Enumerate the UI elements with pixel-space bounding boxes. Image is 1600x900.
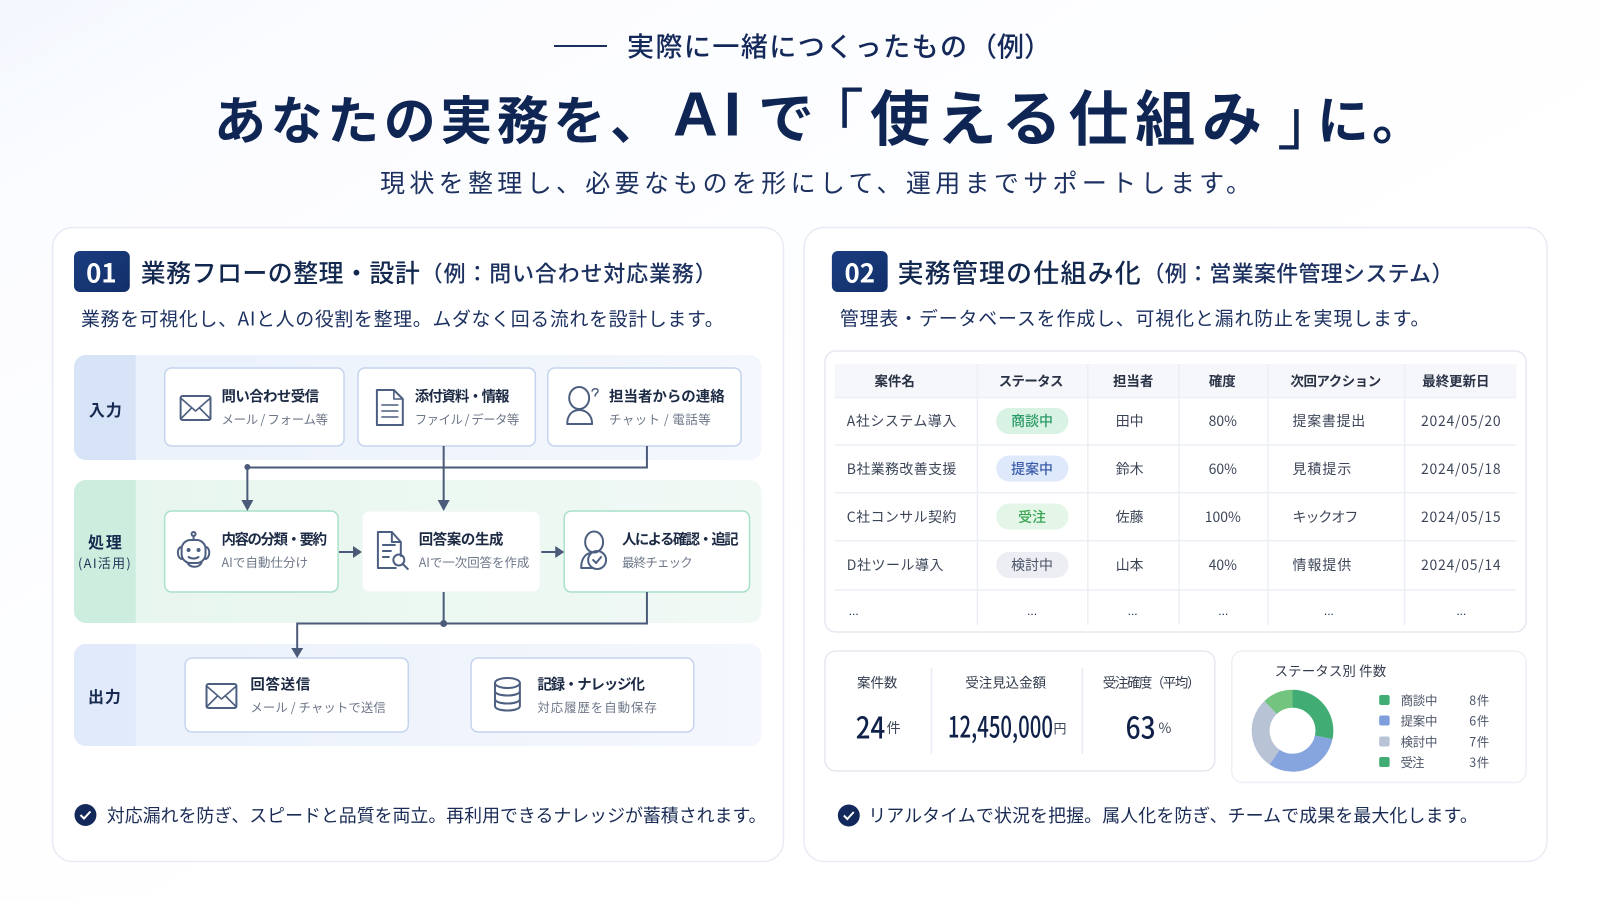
card: record knowledge: 記録・ナレッジ化 — [537, 673, 645, 695]
badge 01 — [74, 251, 130, 292]
card: attachments: ファイル / データ等 — [415, 410, 519, 428]
main title: 使える仕組み — [870, 72, 1262, 158]
table header: 案件名 — [874, 370, 915, 390]
table header — [835, 364, 1517, 397]
table header: 担当者 — [1113, 370, 1153, 390]
card: send answer: メール / チャットで送信 — [250, 698, 386, 716]
card: classify and summarise: AIで自動仕分け — [221, 553, 308, 571]
footer note 02: リアルタイムで状況を把握。属人化を防ぎ、チームで成果を最大化します。 — [868, 802, 1478, 828]
arrows: input to process — [241, 446, 647, 511]
panel: 01 business flow — [52, 228, 784, 862]
chart legend: 商談中 — [1401, 691, 1437, 709]
table row A: 田中 — [1116, 411, 1144, 431]
label: input: 入力 — [89, 397, 122, 421]
row: output — [74, 644, 762, 746]
table row D: 情報提供 — [1293, 555, 1351, 575]
KPI: average probability — [1103, 671, 1200, 748]
panel 01 content — [74, 251, 766, 828]
donut chart — [1261, 699, 1324, 763]
KPI: expected amount: 12,450,000 — [948, 704, 1053, 747]
footer note 01: 対応漏れを防ぎ、スピードと品質を両立。再利用できるナレッジが蓄積されます。 — [107, 802, 766, 828]
table row A: A社システム導入 — [847, 411, 956, 431]
main title: 「 — [802, 68, 864, 158]
row: process — [74, 480, 762, 623]
card: attachments — [358, 368, 535, 446]
KPI: average probability: 受注確度（平均） — [1103, 671, 1200, 692]
chart legend: 3件 — [1469, 753, 1489, 771]
table grid — [835, 364, 1516, 625]
table box — [825, 351, 1526, 632]
panel description 02: 管理表・データベースを作成し、可視化と漏れ防止を実現します。 — [840, 304, 1429, 331]
table row A: 2024/05/20 — [1421, 411, 1501, 431]
panel heading 01 — [141, 254, 717, 290]
card: attachments: 添付資料・情報 — [415, 385, 510, 407]
table row B: 2024/05/18 — [1421, 459, 1501, 479]
card: human check: 最終チェック — [622, 553, 693, 571]
table row ellipsis: ... — [1128, 604, 1138, 618]
KPI: expected amount: 受注見込金額 — [965, 671, 1047, 692]
chart legend: 7件 — [1469, 732, 1489, 751]
panel heading 02: （例：営業案件管理システム） — [1143, 257, 1453, 289]
table row C: 100% — [1205, 507, 1241, 527]
icon: check — [74, 804, 96, 826]
table row C: C社コンサル契約 — [847, 507, 956, 527]
main title — [214, 68, 1427, 162]
KPI: number of cases: 件 — [887, 718, 901, 738]
table row ellipsis: ... — [1218, 604, 1228, 618]
chart title: ステータス別 件数 — [1275, 660, 1387, 680]
table row D: 40% — [1209, 555, 1237, 575]
arrows: process to output — [291, 592, 647, 658]
panel heading 01: 業務フローの整理・設計 — [141, 254, 420, 290]
panel description 01: 業務を可視化し、AIと人の役割を整理。ムダなく回る流れを設計します。 — [81, 304, 724, 332]
card: human check — [564, 511, 750, 592]
table row ellipsis — [849, 604, 1466, 618]
subtitle: 現状を整理し、必要なものを形にして、運用までサポートします。 — [380, 164, 1251, 200]
label: process — [78, 529, 131, 572]
card: inquiry received: 問い合わせ受信 — [221, 385, 320, 407]
chart legend: 提案中 — [1401, 711, 1437, 730]
icon: person check — [581, 532, 606, 569]
KPI: number of cases: 案件数 — [857, 671, 898, 692]
table row A — [847, 408, 1501, 434]
main title: で — [758, 74, 814, 156]
panel: 02 management system — [804, 228, 1547, 862]
card: send answer — [185, 658, 408, 732]
table header: 最終更新日 — [1422, 370, 1489, 390]
KPI: expected amount: 円 — [1053, 718, 1066, 738]
label: process: (AI活用) — [78, 553, 131, 572]
arrows: between process cards — [339, 546, 564, 558]
badge 02: 02 — [844, 253, 875, 291]
card: record knowledge — [471, 658, 694, 732]
chart legend — [1379, 691, 1489, 771]
chart legend: 8件 — [1469, 691, 1489, 709]
table row A: 80% — [1209, 411, 1237, 431]
main title: 」 — [1277, 72, 1339, 162]
kicker text: 実際に一緒につくったもの — [627, 26, 967, 64]
card: contact from staff — [548, 368, 741, 446]
table row B — [847, 456, 1501, 482]
KPI: expected amount — [948, 671, 1066, 747]
table row ellipsis: ... — [1027, 604, 1037, 618]
table row C: 2024/05/15 — [1421, 507, 1501, 527]
table row A: 商談中 — [1011, 411, 1053, 431]
table header: 次回アクション — [1291, 370, 1381, 390]
card: classify and summarise: 内容の分類・要約 — [221, 528, 327, 550]
icon: document search — [378, 532, 408, 569]
table row C: 受注 — [1018, 507, 1046, 527]
chart legend: 検討中 — [1401, 732, 1437, 751]
badge 01: 01 — [86, 253, 117, 291]
card: human check: 人による確認・追記 — [622, 528, 739, 550]
table header: 確度 — [1209, 370, 1236, 390]
kicker text: （例） — [970, 26, 1051, 64]
panel heading 02: 実務管理の仕組み化 — [898, 253, 1141, 291]
KPI: average probability: % — [1159, 718, 1172, 738]
card: inquiry received — [165, 368, 344, 446]
table row D — [847, 552, 1501, 578]
panel heading 02 — [898, 253, 1453, 291]
main title: AI — [673, 80, 747, 150]
card: send answer: 回答送信 — [250, 673, 311, 695]
card: contact from staff: チャット / 電話等 — [609, 410, 711, 428]
icon: document — [377, 390, 403, 425]
icon: robot — [178, 532, 209, 567]
row: input — [74, 355, 762, 460]
table header: ステータス — [999, 370, 1063, 390]
KPI: number of cases: 24 — [856, 703, 885, 748]
chart legend: 受注 — [1401, 753, 1424, 771]
kicker line — [554, 45, 607, 47]
label: output: 出力 — [88, 683, 121, 708]
table row C — [847, 504, 1501, 530]
table row D: 検討中 — [1011, 555, 1053, 575]
card: classify and summarise — [165, 511, 338, 592]
badge 02 — [832, 251, 888, 292]
chart box: status count — [1232, 651, 1526, 782]
table row ellipsis: ... — [1456, 604, 1466, 618]
icon: mail — [207, 684, 236, 708]
table row B: B社業務改善支援 — [847, 459, 956, 479]
table row ellipsis: ... — [849, 604, 859, 618]
table row A: 提案書提出 — [1293, 411, 1365, 431]
table row D: 2024/05/14 — [1421, 555, 1501, 575]
icon: check — [838, 804, 860, 826]
icon: mail — [181, 396, 211, 420]
panel heading 01: （例：問い合わせ対応業務） — [421, 257, 717, 289]
table row D: 山本 — [1116, 555, 1144, 575]
header — [214, 26, 1427, 200]
card: record knowledge: 対応履歴を自動保存 — [537, 698, 657, 716]
table row ellipsis: ... — [1324, 604, 1334, 618]
card: generate draft answer: AIで一次回答を作成 — [419, 553, 529, 571]
main title: あなたの実務を、 — [214, 80, 662, 154]
label: process: 処理 — [88, 529, 122, 553]
table row C: 佐藤 — [1116, 507, 1144, 527]
icon: person with question — [567, 387, 598, 424]
icon: database — [495, 678, 520, 710]
card: contact from staff: 担当者からの連絡 — [609, 385, 725, 407]
table row D: D社ツール導入 — [847, 555, 943, 575]
card: generate draft answer: 回答案の生成 — [419, 528, 504, 550]
chart legend: 6件 — [1469, 711, 1489, 730]
table row B: 60% — [1209, 459, 1237, 479]
table row B: 鈴木 — [1116, 459, 1144, 479]
main title: に。 — [1317, 80, 1427, 154]
KPI: average probability: 63 — [1126, 703, 1156, 748]
table row B: 見積提示 — [1293, 459, 1351, 479]
card: inquiry received: メール / フォーム等 — [221, 410, 328, 428]
table row B: 提案中 — [1011, 459, 1053, 479]
KPI: number of cases — [856, 671, 901, 748]
KPI box — [825, 651, 1215, 771]
card: generate draft answer — [362, 511, 540, 592]
table row C: キックオフ — [1293, 507, 1358, 527]
